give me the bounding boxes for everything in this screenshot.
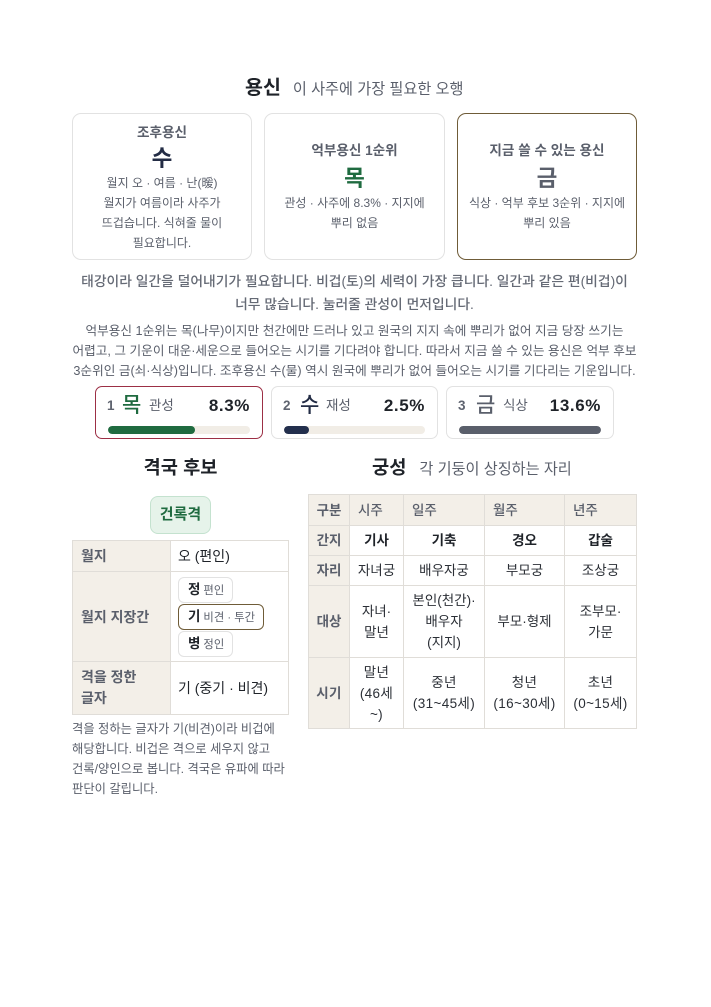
table: 궁성: 중년: [431, 675, 457, 690]
table: 궁성: 구분: [317, 502, 341, 518]
rank card: 금: 13.6%: [550, 396, 601, 415]
rank card: 금: 식상: [503, 398, 528, 413]
table: 격국: [72, 540, 289, 715]
table: 궁성: 배우자궁: [419, 563, 469, 578]
table: 궁성: 본인(천간)·: [412, 593, 476, 608]
panel: 조후용신 card: 월지 오 · 여름 · 난(暖): [107, 176, 217, 190]
table: 궁성: 자리: [317, 563, 341, 578]
table: 궁성: 가문: [588, 624, 613, 640]
panel: 지금 쓸 수 있는 용신 card: 지금 쓸 수 있는 용신: [489, 142, 605, 158]
panel: 억부용신 card: 뿌리 없음: [331, 216, 378, 230]
table: 궁성: (지지): [427, 635, 461, 650]
table: 궁성: 시주: [358, 502, 383, 518]
table: 궁성: 말년: [364, 664, 389, 680]
panel: 조후용신 card: 필요합니다.: [133, 236, 191, 250]
rank card: 목: 1: [107, 398, 115, 413]
table: 궁성: 부모궁: [506, 563, 543, 578]
table: 격국: 정 편인: [188, 582, 224, 596]
rank card: 금: [446, 386, 614, 439]
panel: 지금 쓸 수 있는 용신 card: [457, 113, 637, 260]
badge: 건록격: 건록격: [160, 506, 201, 523]
heading: 격국 후보: 격국 후보: [144, 457, 217, 478]
panel: 지금 쓸 수 있는 용신 card: 뿌리 있음: [523, 216, 571, 230]
table: 궁성: 배우자: [425, 614, 463, 629]
rank card: 목: 관성: [149, 398, 174, 413]
table: 궁성: 년주: [573, 502, 598, 518]
table: 궁성: 조상궁: [582, 563, 619, 578]
rank card: 목: 목: [122, 394, 141, 417]
table: 격국: 기 비견 · 투간: [188, 608, 255, 624]
table: 궁성: 부모·형제: [497, 614, 552, 629]
panel: 지금 쓸 수 있는 용신 card: 금: [537, 166, 557, 190]
rank card: 목: [95, 386, 263, 439]
text block: explanation: [72, 324, 636, 378]
rank card: 수: 2.5%: [384, 396, 425, 415]
table: 궁성: 자녀·: [362, 604, 391, 618]
text block: explanation: 3순위인 금(쇠·식상)입니다. 조후용신 수(물) 역시 원국에 뿌리가 없어 들어오는 시기를 기다리는 기운입니다.: [73, 364, 636, 378]
rank card: 금: 금: [476, 394, 495, 417]
table: 궁성: 기축: [432, 533, 456, 548]
table: 궁성: 자녀궁: [358, 563, 395, 578]
text block: explanation: 어렵고, 그 기운이 대운·세운으로 들어오는 시기를 기다려야 합니다. 따라서 지금 쓸 수 있는 용신은 억부 후보: [72, 344, 636, 358]
text block: 격국 note: 판단이 갈립니다.: [72, 782, 158, 796]
rank card: 수: 수: [300, 394, 319, 417]
panel: 억부용신 card: [264, 113, 445, 260]
text block: 격국 note: [72, 722, 285, 796]
text block: summary: 태강이라 일간을 덜어내기가 필요합니다. 비겁(토)의 세력이 가장 큽니다. 일간과 같은 편(비겁)이: [81, 274, 628, 289]
text block: explanation: 억부용신 1순위는 목(나무)이지만 천간에만 드러나 있고 원국의 지지 속에 뿌리가 없어 지금 당장 쓰기는: [86, 324, 623, 338]
table: 궁성: 기사: [364, 533, 389, 548]
table: 궁성: 경오: [512, 533, 537, 548]
table: 궁성: 초년: [588, 675, 613, 690]
panel: 조후용신 card: 조후용신: [137, 124, 187, 140]
table: 격국: 병 정인: [188, 636, 224, 650]
table: 격국: 글자: [81, 690, 107, 706]
table: 궁성: (31~45세): [413, 696, 475, 711]
panel: 조후용신 card: [72, 113, 252, 260]
panel: 억부용신 card: 관성 · 사주에 8.3% · 지지에: [284, 196, 425, 210]
table: 궁성: (16~30세): [493, 696, 556, 711]
table: 궁성: 조부모·: [580, 604, 621, 618]
table: 궁성: 갑술: [588, 533, 613, 548]
text block: summary: 너무 많습니다. 눌러줄 관성이 먼저입니다.: [235, 297, 474, 312]
table: 궁성: ~): [370, 706, 383, 722]
text block: 격국 note: 격을 정하는 글자가 기(비견)이라 비겁에: [72, 722, 275, 736]
title: 용신: 용신 이 사주에 가장 필요한 오행: [245, 77, 463, 99]
rank card: 수: [271, 386, 438, 439]
panel: 조후용신 card: 월지가 여름이라 사주가: [103, 196, 221, 210]
table: 격국: 월지 지장간: [81, 608, 149, 624]
table: 궁성: 대상: [317, 614, 341, 629]
text block: summary: [81, 274, 628, 312]
heading: 궁성: 궁성 각 기둥이 상징하는 자리: [372, 457, 572, 478]
table: 격국: 기 (중기 · 비견): [178, 680, 268, 696]
table: 궁성: 말년: [364, 624, 389, 640]
badge: 건록격: [150, 496, 211, 534]
table: 궁성: (0~15세): [573, 696, 628, 711]
panel: 억부용신 card: 억부용신 1순위: [311, 142, 398, 158]
table: 궁성: (46세: [360, 686, 393, 700]
rank card: 금: 3: [458, 398, 466, 413]
panel: 조후용신 card: 뜨겁습니다. 식혀줄 물이: [102, 216, 222, 230]
rank card: 목: 8.3%: [209, 396, 250, 415]
table: 궁성: 청년: [512, 675, 537, 690]
rank card: 수: 재성: [326, 398, 351, 413]
table: 궁성: [308, 494, 637, 729]
panel: 지금 쓸 수 있는 용신 card: 식상 · 억부 후보 3순위 · 지지에: [469, 196, 625, 210]
panel: 조후용신 card: 수: [152, 146, 172, 170]
text block: 격국 note: 건록/양인으로 봅니다. 격국은 유파에 따라: [72, 762, 285, 776]
table: 궁성: 일주: [412, 502, 437, 518]
table: 궁성: 시기: [316, 686, 342, 700]
table: 궁성: 간지: [317, 533, 341, 548]
table: 격국: 오 (편인): [178, 548, 230, 564]
table: 궁성: 월주: [493, 502, 518, 518]
table: 격국: 월지: [81, 548, 107, 564]
panel: 억부용신 card: 목: [344, 166, 365, 190]
text block: 격국 note: 해당합니다. 비겁은 격으로 세우지 않고: [72, 742, 270, 756]
rank card: 수: 2: [283, 398, 291, 413]
table: 격국: 격을 정한: [81, 669, 136, 685]
